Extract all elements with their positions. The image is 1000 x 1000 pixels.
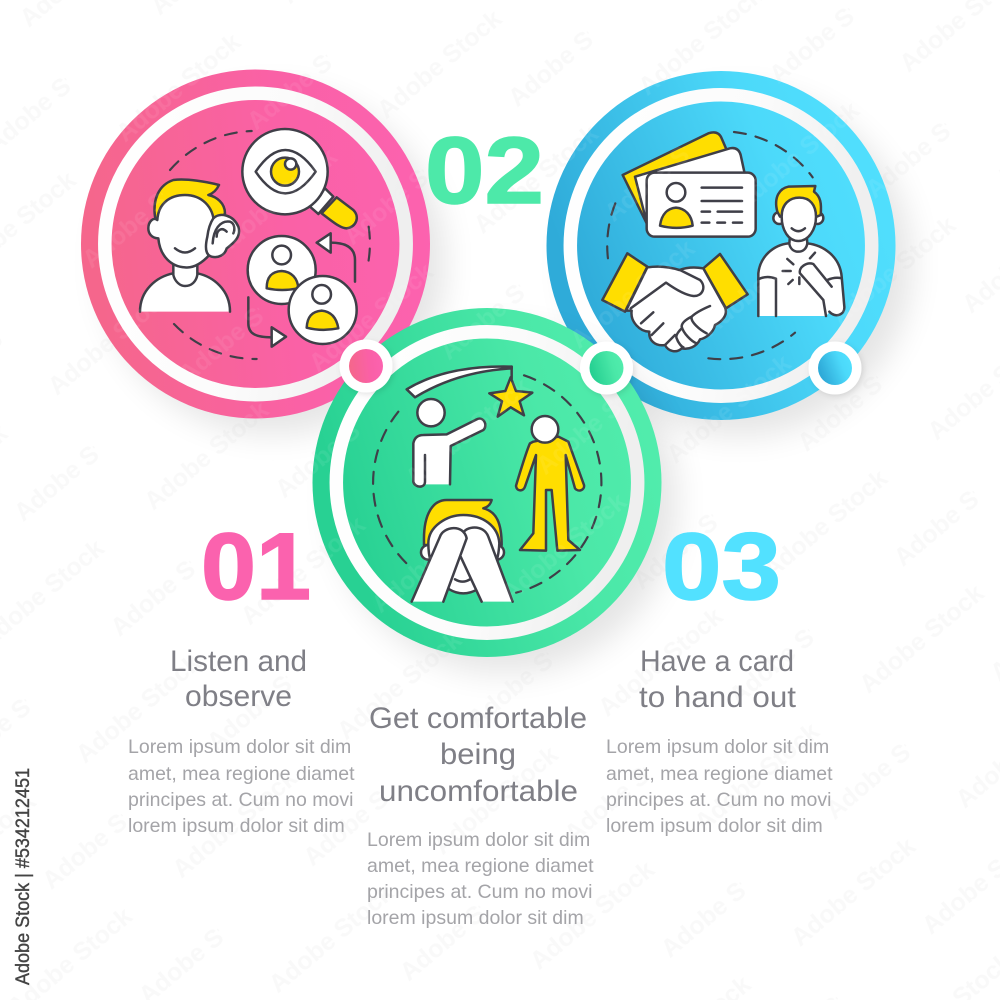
text block: step 2: amet, mea regione diamet bbox=[367, 855, 594, 877]
text block: step 2: Lorem ipsum dolor sit dim bbox=[367, 829, 590, 851]
panel: green circle step 2 bbox=[312, 308, 677, 673]
connector dot: blue bbox=[808, 342, 862, 394]
text block: step 1: principes at. Cum no movi bbox=[128, 789, 353, 811]
heading: get comfortable being uncomfortable: being bbox=[440, 738, 516, 771]
text block: step 3: Lorem ipsum dolor sit dim bbox=[606, 736, 829, 758]
heading: get comfortable being uncomfortable: Get comfortable bbox=[369, 702, 587, 735]
heading: get comfortable being uncomfortable: uncomfortable bbox=[379, 775, 578, 808]
heading: get comfortable being uncomfortable bbox=[369, 702, 587, 808]
connector dot: green bbox=[580, 342, 633, 394]
number 03: 03 bbox=[662, 514, 781, 620]
heading: have a card to hand out: Have a card bbox=[640, 645, 794, 678]
text block: step 1: Lorem ipsum dolor sit dim bbox=[128, 736, 351, 758]
number 02: 02 bbox=[425, 118, 544, 224]
icon: card and handshake bbox=[602, 132, 845, 359]
heading: have a card to hand out: to hand out bbox=[639, 681, 797, 714]
text block: step 3: principes at. Cum no movi bbox=[606, 789, 831, 811]
text block: step 1: lorem ipsum dolor sit dim bbox=[128, 815, 345, 837]
text block: step 3: lorem ipsum dolor sit dim bbox=[606, 815, 823, 837]
text block: step 1: amet, mea regione diamet bbox=[128, 763, 355, 785]
heading: have a card to hand out bbox=[639, 645, 797, 714]
connector dot: pink bbox=[340, 340, 392, 392]
icon: comfort challenge figures bbox=[373, 367, 601, 602]
icon: listen and observe bbox=[140, 129, 370, 359]
text block: step 2: lorem ipsum dolor sit dim bbox=[367, 907, 584, 929]
heading: listen and observe: Listen and bbox=[170, 645, 307, 678]
panel: blue circle step 3 bbox=[546, 71, 912, 436]
text block: step 3: amet, mea regione diamet bbox=[606, 763, 833, 785]
heading: listen and observe: observe bbox=[185, 680, 292, 713]
stock id label: Adobe Stock | #534212451 bbox=[13, 768, 34, 985]
heading: listen and observe bbox=[170, 645, 307, 713]
text block: step 2: principes at. Cum no movi bbox=[367, 881, 592, 903]
panel: pink circle step 1 bbox=[81, 70, 445, 434]
number 01: 01 bbox=[201, 514, 311, 620]
